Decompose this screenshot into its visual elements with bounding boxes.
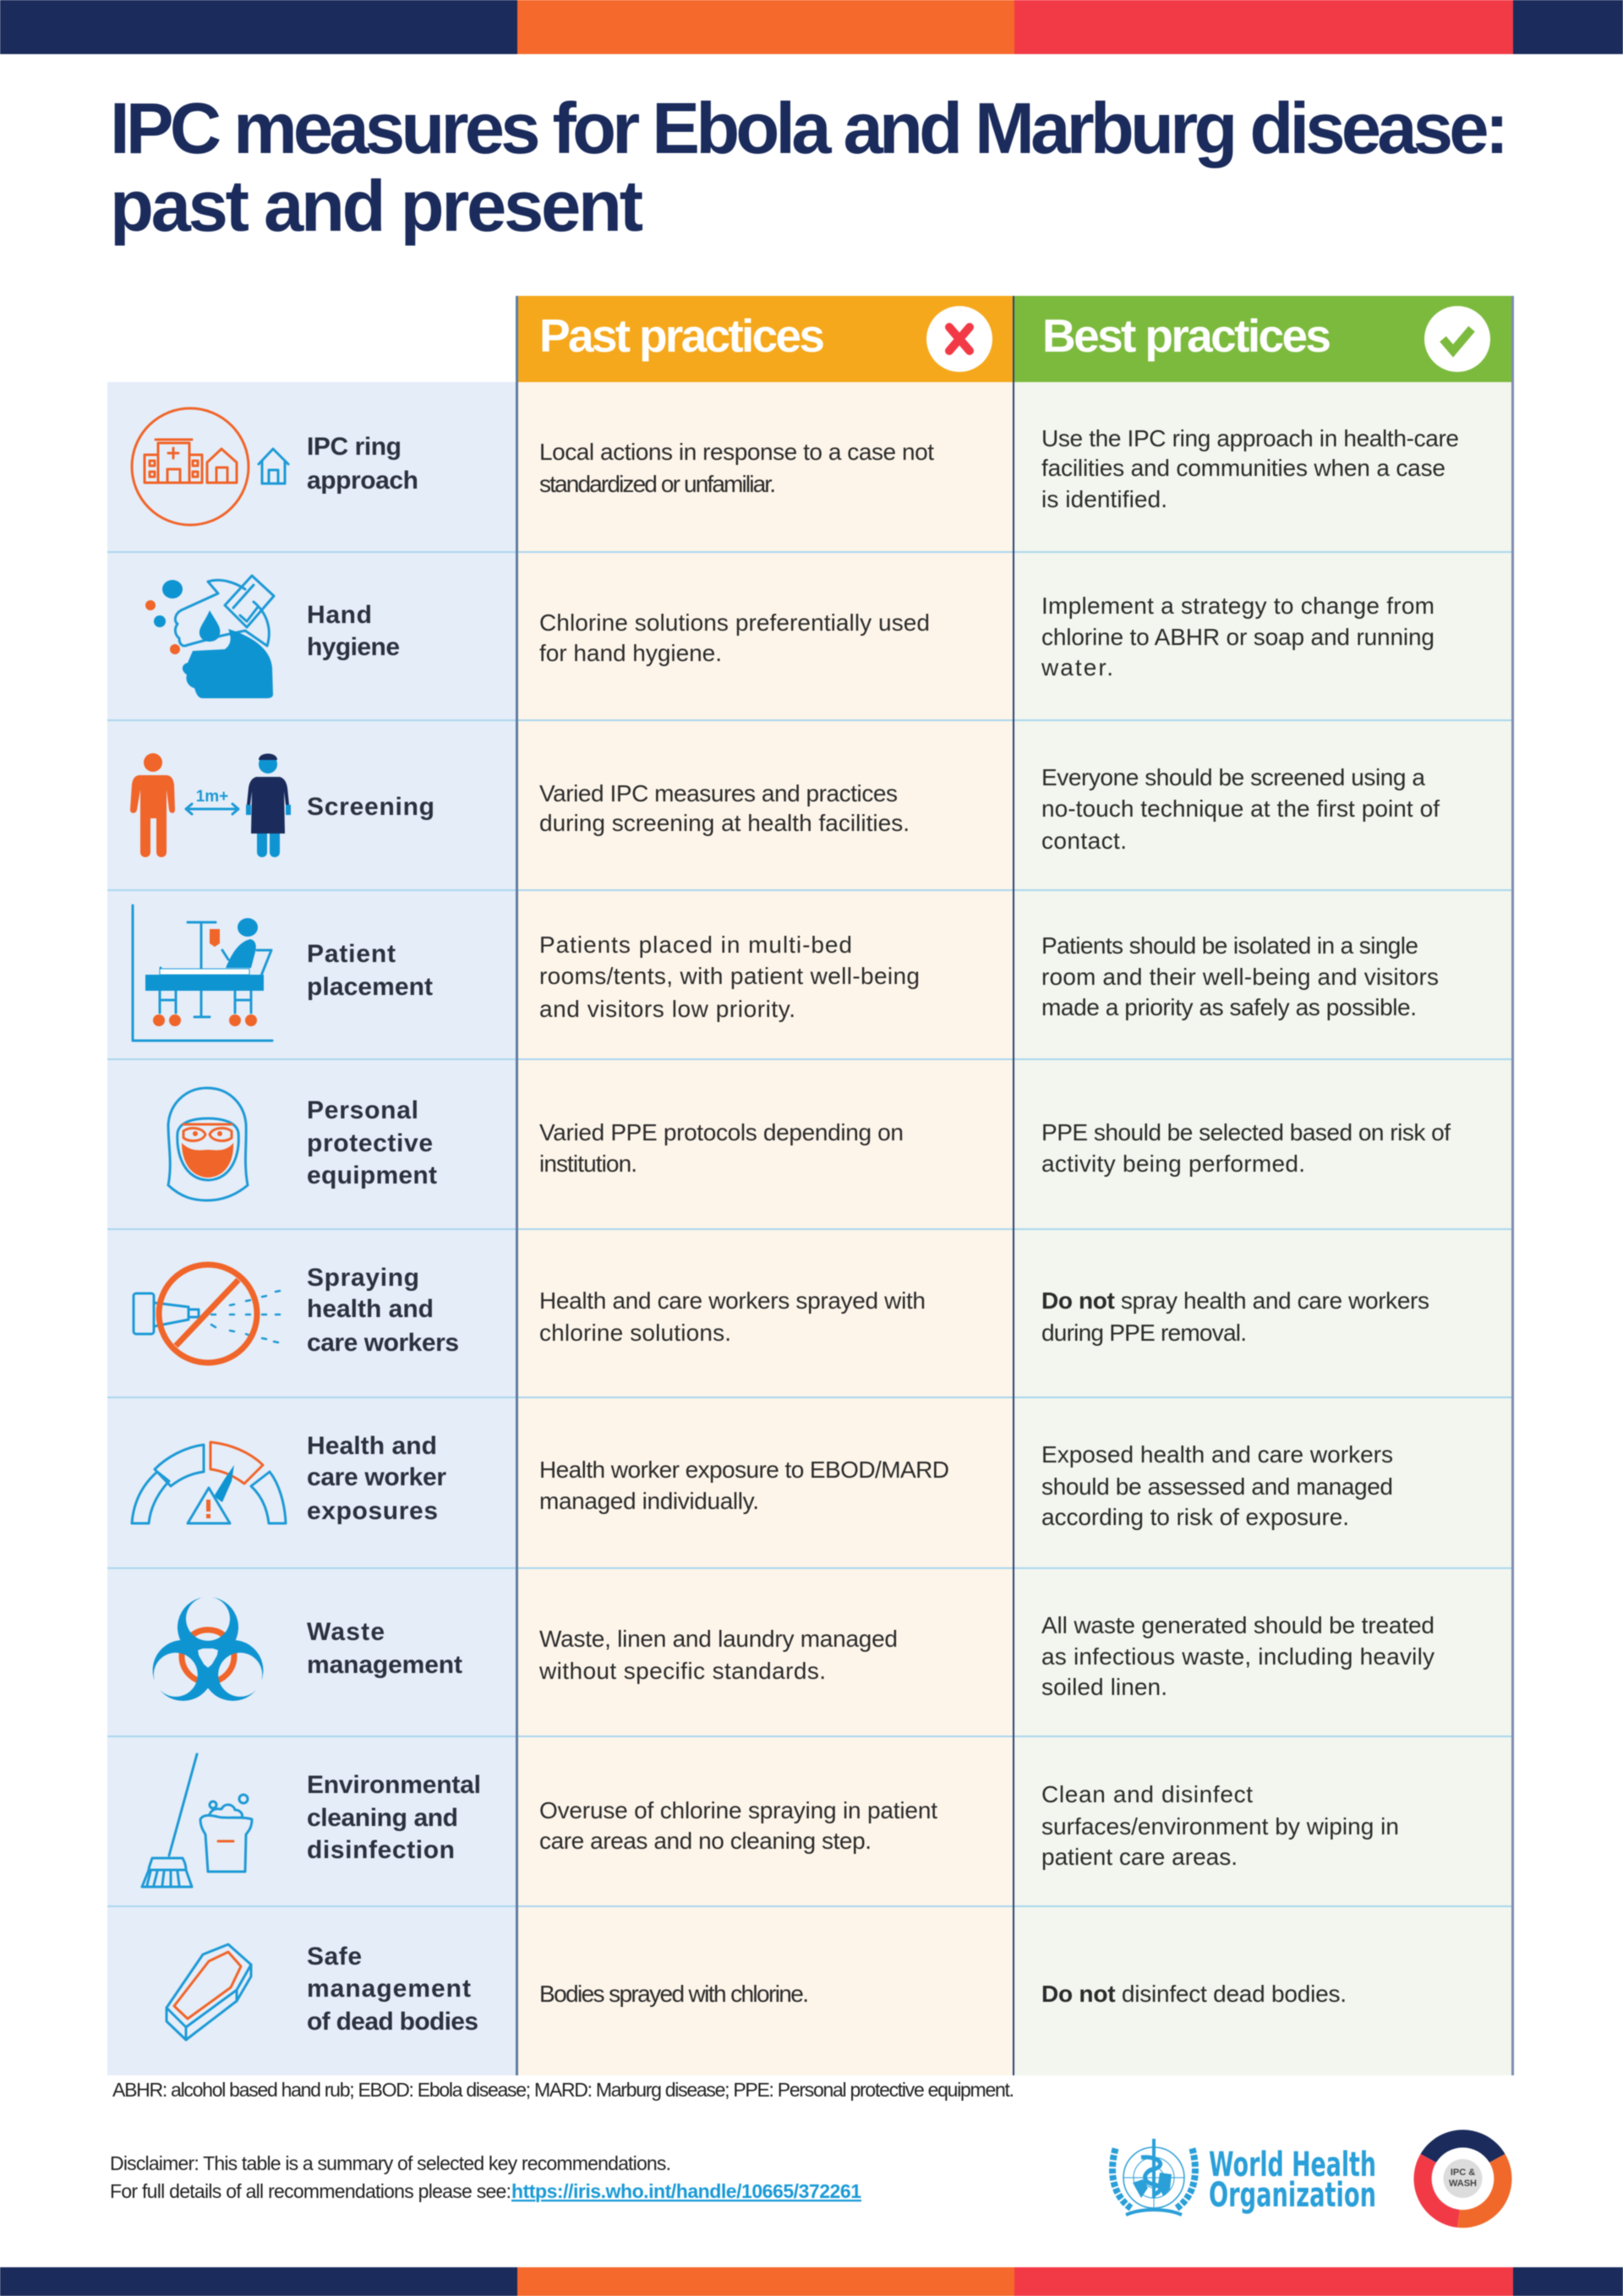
best practice: should be assessed and managed [1041,1473,1393,1500]
best practice [1041,1287,1429,1346]
header: best practices: Best practices [1042,309,1331,362]
row: Personal protective equipment [168,1088,1451,1200]
best practice: All waste generated should be treated [1041,1612,1434,1638]
past practice [539,1797,937,1854]
label: care worker [307,1463,446,1491]
best practice: according to risk of exposure. [1041,1504,1349,1530]
best practice: water. [1041,654,1113,681]
past practice: Waste, linen and laundry managed [539,1626,898,1652]
best practice: Do not disinfect dead bodies. [1041,1981,1347,2007]
label: equipment [307,1162,437,1189]
label [307,1264,459,1357]
best practice: Patients should be isolated in a single [1041,932,1418,959]
label: Personal [307,1096,418,1124]
best practice [1041,1119,1451,1177]
best practice: made a priority as safely as possible. [1041,994,1417,1020]
best practice: is identified. [1041,486,1167,512]
label: Spraying [307,1264,419,1292]
icon: exposure gauge [132,1442,286,1523]
past practice: rooms/tents, with patient well-being [539,963,920,989]
label: Hand [307,601,372,629]
past practice: Varied PPE protocols depending on [539,1119,904,1145]
title: IPC measures for Ebola and Marburg disease: [110,89,1509,169]
label [307,1432,446,1525]
past practice: for hand hygiene. [539,640,722,666]
past practice: Varied IPC measures and practices [539,780,898,806]
best practice: PPE should be selected based on risk of [1041,1119,1451,1145]
label: management [307,1651,462,1679]
icon: biohazard [142,1597,274,1712]
best practice [1041,1781,1399,1870]
title [110,89,1509,247]
abbreviations note: ABHR: alcohol based hand rub; EBOD: Ebola disease; MARD: Marburg disease; PPE: Personal protective equipment. [112,2079,1014,2101]
best practice: no-touch technique at the first point of [1041,795,1440,822]
row: Health and care worker exposures [132,1432,1393,1530]
WHO logo [1112,2139,1376,2215]
top colour band [0,0,1623,54]
IPC and WASH badge: WASH [1449,2178,1477,2189]
row: Safe management of dead bodies [167,1943,1347,2040]
past practice: Overuse of chlorine spraying in patient [539,1797,937,1823]
label [307,940,433,1001]
label: Patient [307,940,396,968]
row: Patient placement [133,905,1439,1041]
past practice: managed individually. [539,1488,759,1514]
disclaimer: Disclaimer: This table is a summary of selected key recommendations. [110,2152,671,2174]
past practice: Patients placed in multi-bed [539,932,852,958]
best practice: as infectious waste, including heavily [1041,1643,1434,1670]
row: Waste management [142,1597,1434,1712]
row: IPC ring approach [132,408,1459,525]
icon: no spraying [134,1265,280,1363]
past practice [538,1626,898,1684]
label [307,1096,437,1189]
icon: WHO emblem [1112,2139,1195,2215]
best practice: Do not spray health and care workers [1041,1287,1429,1314]
best practice: Use the IPC ring approach in health-care [1041,425,1459,451]
bottom colour band [0,2267,1623,2296]
label [307,601,400,661]
header: best practices [1014,296,1512,382]
label: Health and [307,1432,437,1460]
past practice: Health and care workers sprayed with [539,1287,926,1314]
icon: coffin [167,1944,251,2040]
best practice: room and their well-being and visitors [1041,964,1439,990]
best practice: Implement a strategy to change from [1041,593,1434,619]
past practice: during screening at health facilities. [539,810,910,836]
past practice: and visitors low priority. [539,996,795,1022]
label [307,1618,462,1679]
best practice: Exposed health and care workers [1041,1441,1393,1468]
row: Environmental cleaning and disinfection [142,1754,1399,1887]
label [307,1943,478,2036]
WHO wordmark: Organization [1209,2176,1376,2215]
icon: screening people with distance: 1m+ [196,788,228,806]
label: hygiene [307,633,400,661]
past practice [539,1119,904,1177]
icon: patient in bed [133,905,272,1041]
best practice: activity being performed. [1041,1151,1305,1177]
WHO wordmark: World Health [1209,2146,1376,2184]
header: past practices: Past practices [539,309,825,362]
row: Spraying health and care workers [134,1264,1429,1363]
disclaimer [110,2152,861,2202]
past practice: institution. [539,1151,637,1177]
best practice: soiled linen. [1041,1674,1167,1700]
row: Hand hygiene [145,576,1434,698]
label: care workers [307,1329,459,1357]
past practice [539,932,920,1022]
label [307,1771,481,1864]
past practice: Chlorine solutions preferentially used [539,610,930,636]
past practice: standardized or unfamiliar. [539,471,776,497]
IPC and WASH badge: IPC & [1451,2168,1475,2178]
best practice [1041,425,1459,512]
icon: IPC ring with buildings [132,408,288,525]
past practice [539,1287,926,1346]
label: Safe [307,1943,362,1971]
label: placement [307,973,433,1001]
IPC and WASH badge [1413,2129,1511,2228]
icon: screening people with distance [130,753,291,857]
disclaimer: https://iris.who.int/handle/10665/372261 [511,2180,861,2202]
past practice: Health worker exposure to EBOD/MARD [539,1457,949,1483]
label: health and [307,1295,434,1323]
best practice [1041,764,1440,854]
label: exposures [307,1497,438,1525]
best practice: patient care areas. [1041,1844,1238,1870]
icon: PPE hood and mask [168,1088,248,1200]
title: past and present [110,167,643,247]
header: past practices [516,296,1014,382]
past practice [539,610,930,666]
best practice: surfaces/environment by wiping in [1041,1813,1399,1840]
row: Screening [130,753,1440,857]
label: disinfection [307,1836,455,1864]
past practice: Local actions in response to a case not [539,439,934,465]
disclaimer: For full details of all recommendations please see: [110,2180,511,2202]
past practice: care areas and no cleaning step. [539,1828,872,1854]
WHO wordmark [1209,2146,1376,2215]
best practice: facilities and communities when a case [1041,455,1445,481]
past practice [539,439,934,497]
best practice: during PPE removal. [1041,1320,1247,1346]
table backgrounds [107,382,1512,2075]
label: of dead bodies [307,2008,478,2036]
label: management [307,1975,471,2003]
past practice [539,780,910,836]
icon: hand hygiene [145,576,274,698]
column dividers [516,296,1514,2075]
best practice: Clean and disinfect [1041,1781,1253,1807]
past practice: Bodies sprayed with chlorine. [539,1981,809,2007]
label [307,433,418,495]
label: Environmental [307,1771,481,1799]
label: IPC ring [307,433,402,461]
label: cleaning and [307,1804,458,1832]
label: approach [307,467,418,495]
label: Waste [307,1618,385,1646]
label: Screening [307,793,434,821]
best practice: Everyone should be screened using a [1041,764,1425,790]
past practice: without specific standards. [538,1658,826,1684]
best practice [1041,1612,1434,1700]
icon: broom and bucket [142,1754,252,1887]
best practice [1041,932,1439,1020]
past practice [539,1457,949,1514]
best practice [1041,593,1434,681]
best practice: contact. [1041,828,1127,854]
label: protective [307,1129,433,1157]
best practice: chlorine to ABHR or soap and running [1041,624,1434,650]
best practice [1041,1441,1393,1530]
past practice: chlorine solutions. [539,1320,731,1346]
